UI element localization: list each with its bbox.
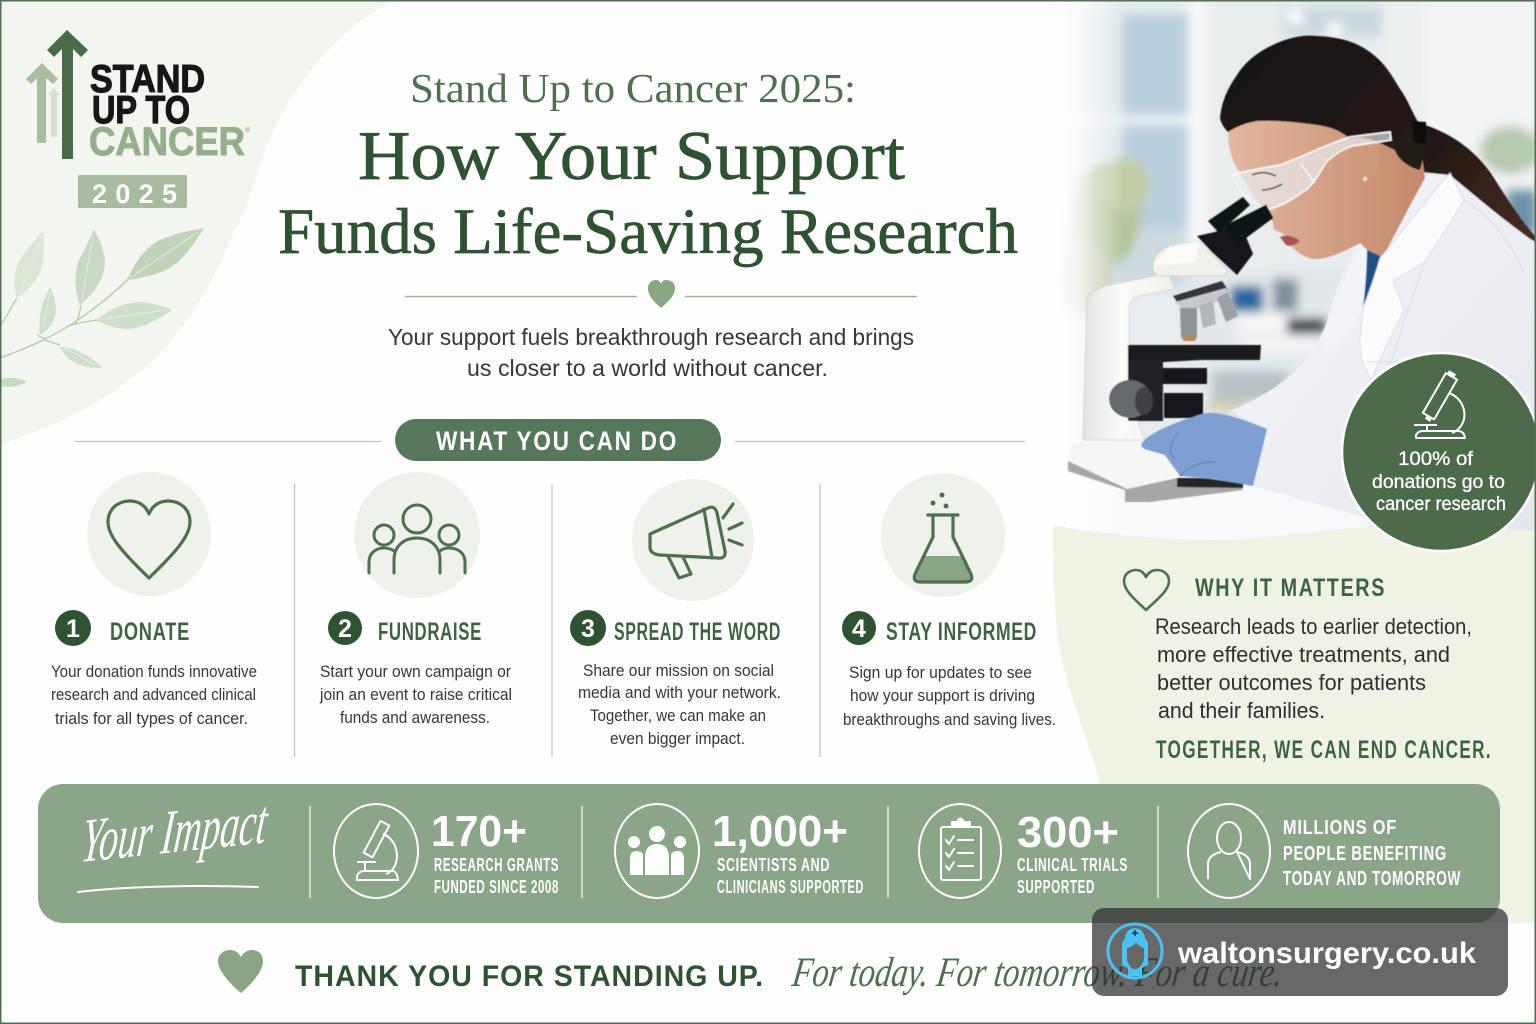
text: tagline: For today. For tomorrow. For a cure. (789, 949, 1286, 996)
text: 300+: 300+ (1017, 808, 1119, 857)
scientist figure (1220, 36, 1536, 545)
text: millions label: PEOPLE BENEFITING (1283, 843, 1447, 865)
text: 170+: 170+ (431, 807, 527, 856)
microscope (1068, 197, 1273, 502)
heading: why it matters: WHY IT MATTERS (1195, 574, 1386, 602)
number 3: 3 (581, 615, 595, 643)
left fade (1053, 2, 1118, 442)
title block (278, 65, 1018, 268)
objective turret (1172, 280, 1228, 302)
stat: scientists (615, 804, 864, 898)
text: badge caption: donations go to (1372, 472, 1505, 493)
year badge: 2025 (92, 179, 177, 209)
logo wordmark: CANCER (89, 120, 245, 164)
title block: How Your Support (358, 118, 906, 195)
microscope head (1153, 241, 1228, 276)
text: fundraise description: Start your own campaign or (320, 662, 511, 681)
number 1 (55, 610, 91, 646)
year badge (78, 175, 187, 209)
section heading: what you can do: WHAT YOU CAN DO (436, 426, 678, 456)
text: clinical trials label: CLINICAL TRIALS (1017, 855, 1128, 875)
number 2: 2 (338, 615, 352, 643)
icon: megaphone (632, 479, 754, 601)
panel: why it matters background (1053, 525, 1536, 923)
coat lapels (1360, 243, 1368, 306)
panel: why it matters (1124, 570, 1492, 764)
microscope base (1068, 440, 1178, 478)
subtitle (388, 324, 914, 381)
text: research grants label: RESEARCH GRANTS (434, 855, 559, 875)
lab coat (1230, 172, 1536, 545)
icon: microscope (334, 804, 418, 898)
text: spread the word description: Share our mission on social (583, 661, 774, 680)
icon: heart outline (1124, 570, 1169, 610)
logo wordmark (89, 58, 251, 164)
badge: 100% of donations (1342, 353, 1536, 551)
text: why it matters body: more effective treatments, and (1157, 642, 1450, 667)
gloved hand (1141, 413, 1267, 486)
text: badge caption: 100% of (1398, 449, 1474, 470)
hair (1220, 36, 1424, 170)
panel: your impact bar (38, 784, 1500, 923)
text: spread the word description: media and with your network. (578, 683, 781, 702)
text: millions label: MILLIONS OF (1283, 817, 1397, 839)
stat: research grants (334, 804, 559, 898)
text: donate description: research and advanced clinical (51, 685, 256, 704)
illustration: leaf branch (0, 228, 204, 387)
subtitle: us closer to a world without cancer. (467, 355, 828, 381)
corner panel: top-left curved background (0, 0, 393, 445)
panel: spread the word (570, 479, 781, 748)
text: research grants label (434, 855, 559, 897)
text: stay informed description: breakthroughs and saving lives. (843, 710, 1056, 729)
text: clinical trials label: SUPPORTED (1017, 877, 1095, 897)
footer message (218, 949, 1286, 996)
icon: people (615, 804, 699, 898)
text: why it matters body: Research leads to earlier detection, (1155, 614, 1472, 639)
text: badge caption (1372, 449, 1506, 515)
panel: stay informed (842, 473, 1056, 729)
icon: nurse logo (1108, 924, 1162, 978)
text: spread the word description (578, 661, 781, 748)
subtitle: Your support fuels breakthrough research and brings (388, 324, 914, 350)
section heading: what you can do (75, 419, 1025, 461)
icon: person (1188, 804, 1270, 898)
photo: scientist at microscope (1053, 0, 1536, 545)
microscope stage (1128, 345, 1261, 362)
icon: heart (218, 950, 263, 993)
title block: Funds Life-Saving Research (278, 196, 1018, 268)
text: scientists label: CLINICIANS SUPPORTED (717, 877, 864, 897)
panel: fundraise (319, 472, 512, 727)
text: why it matters body: better outcomes for patients (1157, 670, 1426, 695)
bench top (1092, 468, 1368, 540)
stat: clinical trials (919, 804, 1128, 898)
text: stay informed description: Sign up for updates to see (849, 663, 1032, 682)
title block: Stand Up to Cancer 2025: (410, 65, 856, 111)
microscope knob (1109, 380, 1151, 418)
heading: spread the word: SPREAD THE WORD (614, 618, 781, 646)
icon: logo arrows (26, 30, 88, 159)
microscope arm (1083, 273, 1175, 440)
heading: stay informed: STAY INFORMED (886, 618, 1037, 646)
icon: people (354, 472, 480, 598)
heading: donate: DONATE (110, 618, 190, 646)
text: fundraise description (319, 662, 512, 727)
icon: flask (881, 473, 1005, 597)
lab background, blurred (1057, 0, 1536, 411)
heart divider (405, 280, 917, 308)
safety goggles (1232, 132, 1391, 209)
text: stay informed description: how your support is driving (850, 686, 1035, 705)
text: scientists label (717, 855, 864, 897)
number 3 (570, 610, 606, 646)
text: spread the word description: even bigger impact. (610, 729, 745, 748)
text: 1,000+: 1,000+ (712, 807, 848, 856)
panel: donate (51, 472, 257, 728)
stat: millions (1188, 804, 1461, 898)
hair tie (1412, 121, 1426, 144)
text: fundraise description: join an event to raise critical (319, 685, 512, 704)
number 1: 1 (66, 615, 80, 643)
icon: clipboard (919, 804, 1001, 898)
eyepieces (1197, 222, 1253, 275)
eye and lips (1252, 173, 1282, 190)
number 4: 4 (852, 615, 866, 643)
text: why it matters body (1155, 614, 1472, 723)
ponytail (1415, 122, 1536, 242)
icon: microscope (1414, 372, 1465, 438)
number 2 (328, 611, 362, 645)
logo wordmark: ® (245, 126, 251, 134)
text: donate description (51, 662, 257, 728)
text: donate description: Your donation funds innovative (51, 662, 257, 681)
watermark: waltonsurgery.co.uk (1092, 908, 1508, 996)
heading: your impact: Your Impact (79, 786, 272, 876)
number 4 (842, 611, 876, 645)
heading: fundraise: FUNDRAISE (378, 618, 482, 646)
text: research grants label: FUNDED SINCE 2008 (434, 877, 559, 897)
text: fundraise description: funds and awareness. (340, 708, 490, 727)
text: scientists label: SCIENTISTS AND (717, 855, 830, 875)
text: badge caption: cancer research (1376, 494, 1506, 515)
ear and earring (1354, 143, 1380, 181)
text: why it matters body: and their families. (1158, 698, 1325, 723)
text: site url: waltonsurgery.co.uk (1177, 937, 1476, 970)
neck and face (1228, 105, 1425, 262)
text: thank you: THANK YOU FOR STANDING UP. (295, 960, 764, 993)
text: spread the word description: Together, we can make an (590, 706, 766, 725)
text: clinical trials label (1017, 855, 1128, 897)
logo wordmark: STAND (90, 58, 205, 101)
text: donate description: trials for all types of cancer. (55, 709, 248, 728)
logo: Stand Up To Cancer (26, 30, 251, 209)
scrub collar (1363, 250, 1380, 308)
text: stay informed description (843, 663, 1056, 729)
heading: your impact (78, 786, 272, 892)
logo wordmark: UP TO (92, 89, 190, 132)
text: millions label (1283, 817, 1461, 890)
icon: heart (87, 472, 211, 596)
